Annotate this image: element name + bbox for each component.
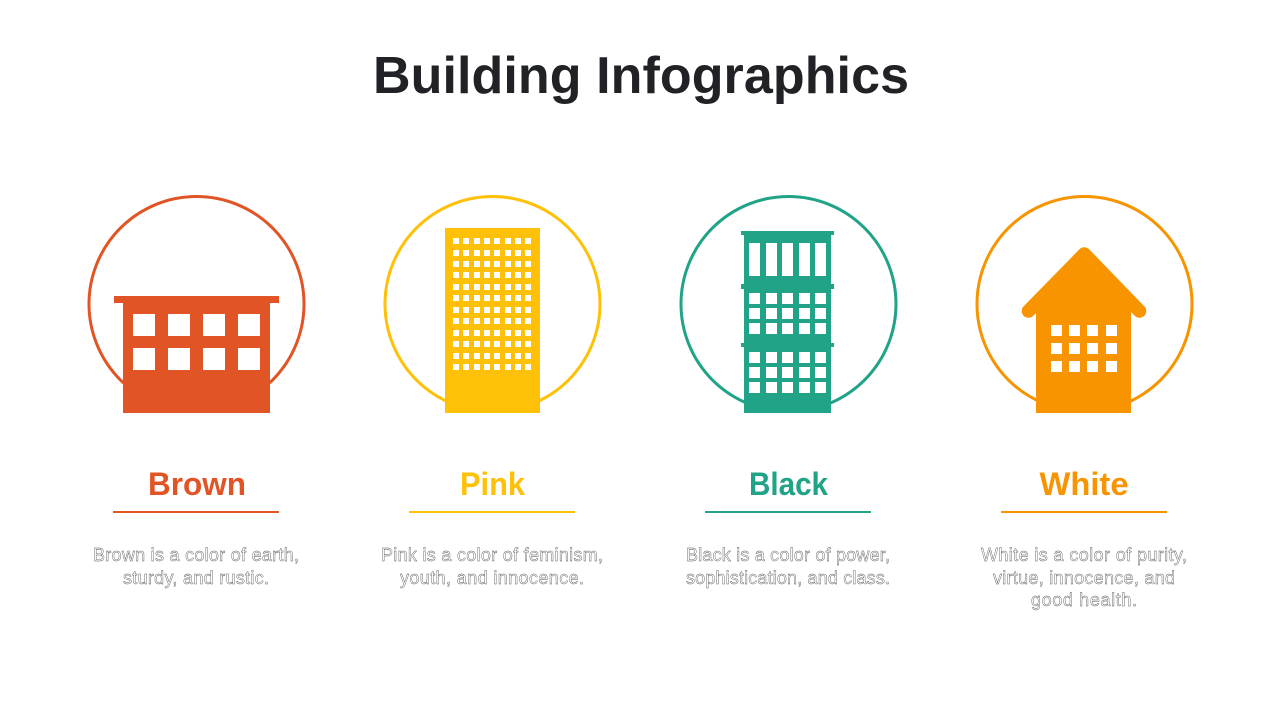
text: pink description: Pink is a color of feminism, <box>381 545 603 565</box>
icon: green building <box>681 196 896 413</box>
text: black description <box>686 545 890 588</box>
text: white description: White is a color of purity, <box>981 545 1187 565</box>
panel: black <box>681 196 896 588</box>
icon: brown building <box>89 196 304 413</box>
text: brown description: Brown is a color of earth, <box>93 545 299 565</box>
panel: brown <box>89 196 304 588</box>
heading: pink: Pink <box>460 466 525 502</box>
text: brown description <box>93 545 299 588</box>
panel: white <box>977 196 1192 610</box>
text: black description: sophistication, and class. <box>686 568 890 588</box>
text: pink description: youth, and innocence. <box>400 568 584 588</box>
icon: pink building <box>385 196 600 413</box>
text: pink description <box>381 545 603 588</box>
title: Building Infographics <box>373 47 909 105</box>
panel: pink <box>381 196 603 588</box>
text: white description <box>981 545 1187 610</box>
heading: black: Black <box>749 466 828 502</box>
text: white description: good health. <box>1031 590 1137 610</box>
heading: brown: Brown <box>148 466 246 502</box>
text: black description: Black is a color of power, <box>686 545 890 565</box>
text: brown description: sturdy, and rustic. <box>123 568 269 588</box>
heading: white: White <box>1040 466 1128 502</box>
icon: orange house <box>977 196 1192 413</box>
text: white description: virtue, innocence, and <box>993 568 1175 588</box>
